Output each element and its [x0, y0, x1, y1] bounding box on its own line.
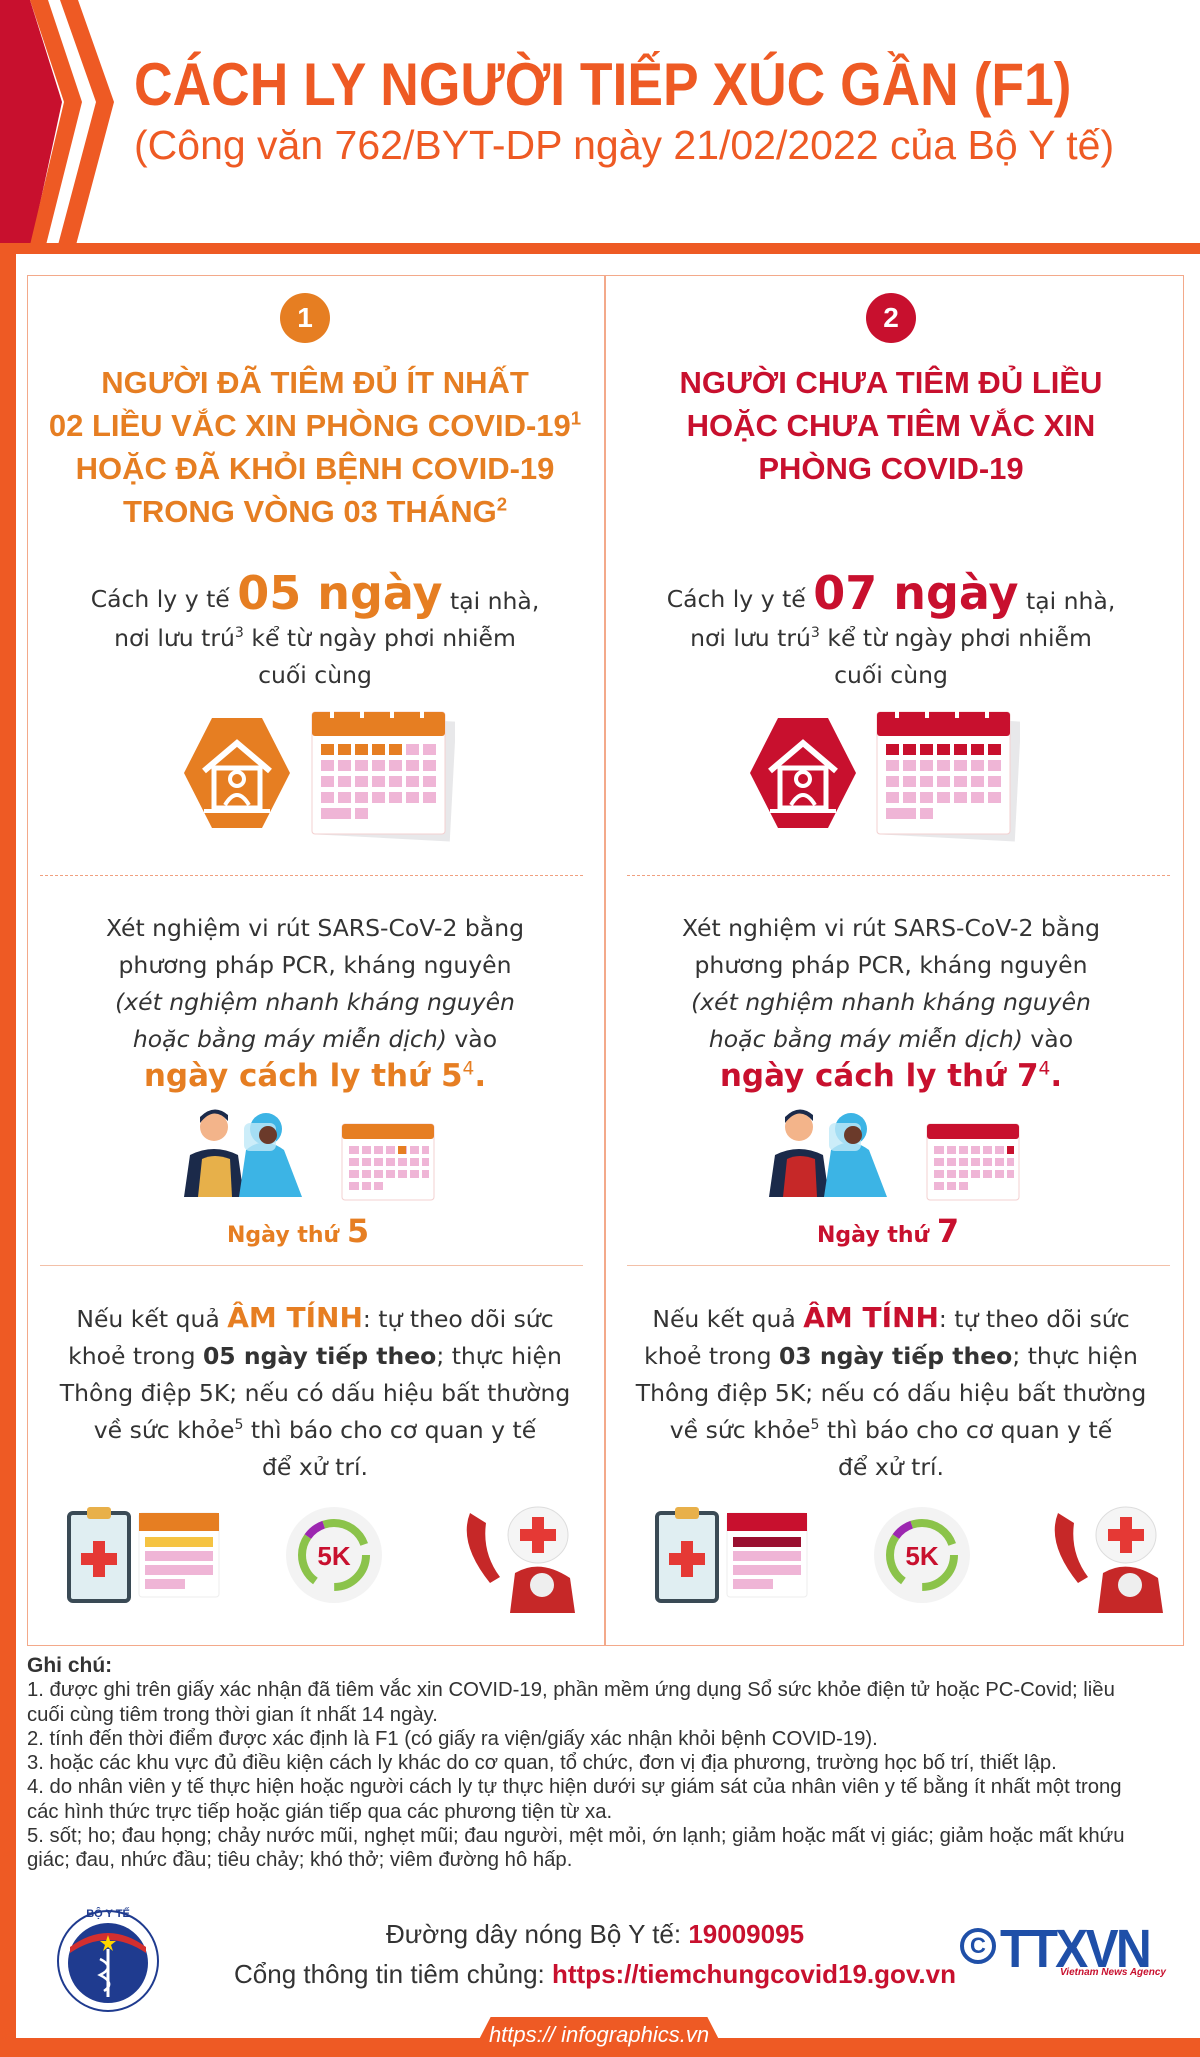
- notes: 3. hoặc các khu vực đủ điều kiện cách ly khác do cơ quan, tổ chức, đơn vị địa phương, trường học bố trí, thiết lập.: [27, 1752, 1057, 1774]
- icons: clipboard, calendar, 5K, phone: 5K: [905, 1541, 939, 1571]
- logo: TTXVN: Vietnam News Agency: [1060, 1967, 1166, 1978]
- test text: Xét nghiệm vi rút SARS-CoV-2 bằng: [106, 914, 524, 942]
- test text: ngày cách ly thứ 54.: [144, 1058, 486, 1094]
- test text: hoặc bằng máy miễn dịch) vào: [133, 1025, 497, 1053]
- notes: 5. sốt; ho; đau họng; chảy nước mũi, nghẹt mũi; đau người, mệt mỏi, ớn lạnh; giảm hoặc mất vị giác; giảm hoặc mất khứu: [27, 1825, 1124, 1847]
- heading right: NGƯỜI CHƯA TIÊM ĐỦ LIỀU: [680, 365, 1102, 400]
- notes: [27, 1654, 1124, 1871]
- result text: [60, 1301, 570, 1481]
- test text: (xét nghiệm nhanh kháng nguyên: [691, 988, 1091, 1016]
- left border: [0, 243, 16, 2057]
- quarantine text: [91, 566, 539, 689]
- number badge 1: [280, 293, 330, 343]
- hotline info: Đường dây nóng Bộ Y tế: 19009095: [386, 1919, 804, 1949]
- test text: [682, 914, 1100, 1094]
- subtitle: (Công văn 762/BYT-DP ngày 21/02/2022 của Bộ Y tế): [134, 122, 1114, 168]
- heading left: [49, 365, 581, 529]
- logo: ministry of health: BỘ Y TẾ: [86, 1907, 130, 1920]
- test text: Xét nghiệm vi rút SARS-CoV-2 bằng: [682, 914, 1100, 942]
- panel: vaccinated (left): [49, 293, 581, 1613]
- result text: Thông điệp 5K; nếu có dấu hiệu bất thường: [636, 1379, 1146, 1407]
- result text: khoẻ trong 03 ngày tiếp theo; thực hiện: [644, 1342, 1138, 1370]
- result text: Nếu kết quả ÂM TÍNH: tự theo dõi sức: [652, 1301, 1130, 1334]
- quarantine text: [667, 566, 1115, 689]
- label: day 5: Ngày thứ 5: [227, 1212, 369, 1250]
- quarantine text: Cách ly y tế 07 ngày tại nhà,: [667, 566, 1115, 620]
- heading left: 02 LIỀU VẮC XIN PHÒNG COVID-191: [49, 408, 581, 443]
- quarantine text: cuối cùng: [834, 661, 948, 689]
- heading right: [680, 365, 1102, 486]
- logo: TTXVN: C: [970, 1933, 986, 1958]
- logo: ministry of health: [57, 1907, 159, 2012]
- notes: giác; đau, nhức đầu; tiêu chảy; khó thở; viêm đường hô hấp.: [27, 1849, 572, 1871]
- heading left: TRONG VÒNG 03 THÁNG2: [123, 494, 507, 529]
- title: CÁCH LY NGƯỜI TIẾP XÚC GẦN (F1): [134, 51, 1071, 118]
- label: day 7: Ngày thứ 7: [817, 1212, 959, 1250]
- result text: [636, 1301, 1146, 1481]
- icons: clipboard, calendar, 5K, phone: [655, 1506, 1163, 1613]
- notes: các hình thức trực tiếp hoặc gián tiếp qua các phương tiện từ xa.: [27, 1801, 612, 1823]
- heading left: HOẶC ĐÃ KHỎI BỆNH COVID-19: [76, 451, 554, 486]
- hotline info: Cổng thông tin tiêm chủng: https://tiemchungcovid19.gov.vn: [234, 1959, 956, 1989]
- panels box: [27, 275, 1184, 1646]
- test text: phương pháp PCR, kháng nguyên: [695, 951, 1087, 979]
- heading right: HOẶC CHƯA TIÊM VẮC XIN: [687, 408, 1095, 443]
- icons: clipboard, calendar, 5K, phone: 5K: [317, 1541, 351, 1571]
- result text: Nếu kết quả ÂM TÍNH: tự theo dõi sức: [76, 1301, 554, 1334]
- icon: calendar day 7: [926, 1124, 1020, 1200]
- result text: khoẻ trong 05 ngày tiếp theo; thực hiện: [68, 1342, 562, 1370]
- icon: calendar 7 days: [876, 712, 1020, 842]
- icon: swab test: [184, 1110, 302, 1197]
- test text: (xét nghiệm nhanh kháng nguyên: [115, 988, 515, 1016]
- notes: 1. được ghi trên giấy xác nhận đã tiêm vắc xin COVID-19, phần mềm ứng dụng Sổ sức khỏe điện tử hoặc PC-Covid; liều: [27, 1679, 1115, 1701]
- icon: calendar day 5: [342, 1124, 434, 1200]
- notes: cuối cùng tiêm trong thời gian ít nhất 14 ngày.: [27, 1704, 438, 1726]
- notes: 4. do nhân viên y tế thực hiện hoặc người cách ly tự thực hiện dưới sự giám sát của nhân viên y tế bằng ít nhất một trong: [27, 1776, 1122, 1798]
- quarantine text: cuối cùng: [258, 661, 372, 689]
- result text: Thông điệp 5K; nếu có dấu hiệu bất thường: [60, 1379, 570, 1407]
- icon: house hexagon red: [750, 718, 856, 828]
- notes: Ghi chú:: [27, 1654, 112, 1677]
- number badge 2: 2: [883, 302, 899, 333]
- icon: house hexagon: [184, 718, 290, 828]
- quarantine text: Cách ly y tế 05 ngày tại nhà,: [91, 566, 539, 620]
- test text: [106, 914, 524, 1094]
- number badge 2: [866, 293, 916, 343]
- number badge 1: 1: [297, 302, 313, 333]
- heading left: NGƯỜI ĐÃ TIÊM ĐỦ ÍT NHẤT: [101, 365, 529, 400]
- heading right: PHÒNG COVID-19: [758, 451, 1024, 486]
- panel: unvaccinated (right): [636, 293, 1163, 1613]
- icons: clipboard, calendar, 5K, phone: [67, 1506, 575, 1613]
- test text: hoặc bằng máy miễn dịch) vào: [709, 1025, 1073, 1053]
- result text: để xử trí.: [838, 1453, 944, 1481]
- result text: để xử trí.: [262, 1453, 368, 1481]
- test text: ngày cách ly thứ 74.: [720, 1058, 1062, 1094]
- quarantine text: nơi lưu trú3 kể từ ngày phơi nhiễm: [114, 624, 516, 652]
- footer bar with URL tab: [0, 2038, 1200, 2057]
- test text: phương pháp PCR, kháng nguyên: [119, 951, 511, 979]
- result text: về sức khỏe5 thì báo cho cơ quan y tế: [94, 1416, 536, 1444]
- hotline info: [234, 1919, 956, 1989]
- logo: TTXVN: TTXVN: [1000, 1919, 1149, 1979]
- result text: về sức khỏe5 thì báo cho cơ quan y tế: [670, 1416, 1112, 1444]
- footer url: https:// infographics.vn: [489, 2022, 709, 2047]
- header decoration: left chevrons: [0, 0, 114, 243]
- notes: 2. tính đến thời điểm được xác định là F1 (có giấy ra viện/giấy xác nhận khỏi bệnh COVID-19).: [27, 1728, 878, 1750]
- header bar: [0, 243, 1200, 254]
- icon: swab test: [769, 1110, 887, 1197]
- quarantine text: nơi lưu trú3 kể từ ngày phơi nhiễm: [690, 624, 1092, 652]
- icon: calendar 5 days: [312, 712, 455, 842]
